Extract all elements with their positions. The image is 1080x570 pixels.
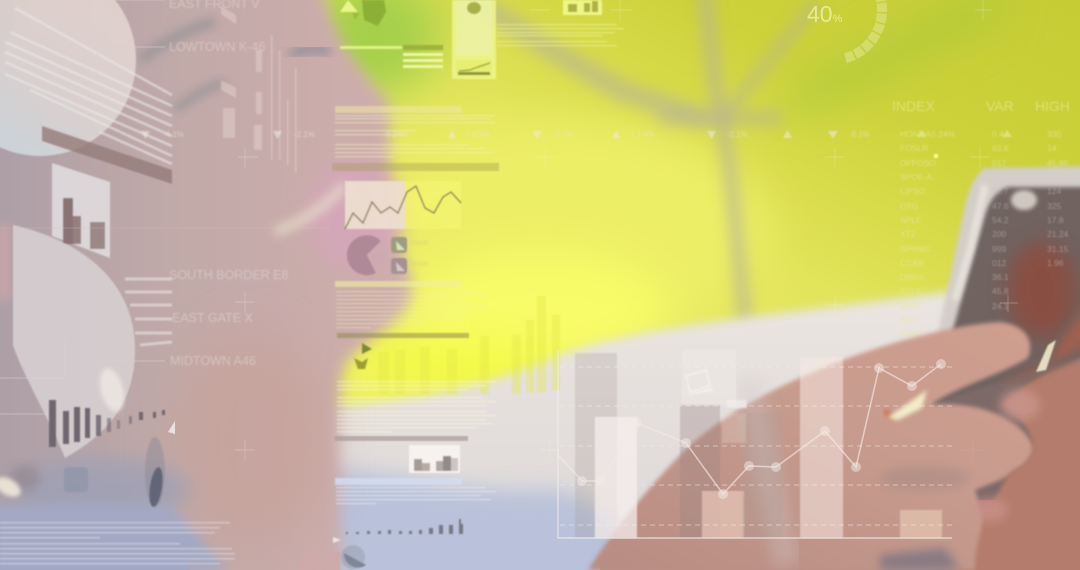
phone table values: 200	[992, 229, 1006, 239]
centre: bottom text block	[335, 478, 496, 504]
data table: 14	[1047, 143, 1057, 153]
data table: SPOE-A	[900, 172, 932, 182]
place labels: MIDTOWN A46	[170, 354, 256, 368]
ticker markers row: + 1.4%	[630, 130, 655, 139]
white card with bars	[52, 163, 110, 258]
pale stripe panel	[125, 279, 172, 345]
data table: LIPSO	[900, 186, 925, 196]
data table: DRGS	[900, 272, 925, 282]
data table: INDEX	[892, 98, 935, 114]
data table: SPRMS	[900, 244, 931, 254]
large pale shield shape	[13, 225, 135, 458]
centre: legend tiles: 00000	[410, 240, 428, 247]
face column graphics	[221, 6, 296, 173]
top centre: text block	[497, 24, 624, 46]
data table: SHT	[900, 315, 917, 325]
data table: FOSLR	[900, 143, 928, 153]
ticker markers row	[141, 130, 870, 139]
centre: legend tiles	[391, 237, 428, 274]
crosshair markers	[0, 0, 1018, 460]
leader lines	[0, 0, 165, 414]
phone table values: 24.1	[992, 301, 1009, 311]
ticker markers row: -8.1%	[849, 130, 870, 139]
data table: HONDA	[900, 129, 931, 139]
phone table values: 325	[1047, 201, 1061, 211]
centre: lower text block	[337, 381, 497, 432]
centre: bottom pie and arrow	[333, 537, 366, 569]
place labels: EAST GATE X	[172, 311, 253, 325]
centre: legend tiles: 00000	[410, 261, 428, 268]
phone table values: 17.8	[1047, 215, 1064, 225]
phone table values: 21.24	[1047, 229, 1069, 239]
phone table values: 1.96	[1047, 258, 1064, 268]
side dial	[145, 437, 165, 507]
data table: CCAN	[900, 258, 924, 268]
phone table values: 47.6	[992, 201, 1009, 211]
laptop icon	[686, 370, 747, 443]
data table: OTG	[900, 201, 918, 211]
background: green and grey blurred foliage	[310, 0, 1000, 389]
ticker markers row: -2.1%	[294, 130, 315, 139]
phone table values: 57.7	[992, 186, 1009, 196]
data table: 0.4	[992, 129, 1004, 139]
centre: faded area chart	[378, 296, 560, 394]
top centre: green pie icon	[340, 0, 386, 26]
left panel: data graphics	[0, 0, 175, 508]
diagonal stripe panel	[5, 8, 172, 164]
dashed grid lines	[560, 367, 952, 525]
place labels: SOUTH BORDER E8	[169, 268, 289, 282]
data table: VAR	[986, 98, 1014, 114]
background: leaf stem	[480, 0, 815, 380]
main combo chart	[558, 350, 952, 538]
person: facial features	[0, 22, 405, 550]
phone table values: 36.1	[992, 272, 1009, 282]
ticker markers row: + 0.5%	[465, 130, 490, 139]
centre: line chart card	[345, 181, 461, 229]
phone table values: 31.15	[1047, 244, 1069, 254]
phone	[920, 166, 1080, 420]
data table: XTZ	[900, 229, 916, 239]
data table: SPLF	[900, 215, 921, 225]
top centre: divider and small table	[340, 45, 443, 68]
top centre: tall card	[452, 0, 496, 79]
place labels	[169, 0, 289, 368]
ticker markers row: 0.24%	[386, 130, 409, 139]
data table: HIGH	[1035, 98, 1070, 114]
person: face silhouette	[0, 0, 412, 570]
centre: small rising column chart	[346, 519, 463, 534]
phone table values: 124	[1047, 186, 1061, 196]
phone table values: 54.2	[992, 215, 1009, 225]
chart axes	[558, 350, 952, 538]
centre: grey heading bar	[335, 436, 468, 441]
bottom left: paragraph text	[0, 522, 235, 564]
person: shirt bottom left	[0, 505, 228, 570]
data table: 0.24%	[931, 129, 956, 139]
centre: bar chart card	[409, 445, 460, 473]
trend line	[558, 364, 941, 494]
background: pale table and blue shirt	[300, 290, 1010, 570]
table bullet	[934, 154, 938, 158]
ticker markers row: -2.1%	[727, 130, 748, 139]
data table: 62.6	[992, 143, 1009, 153]
trend markers	[577, 359, 946, 499]
top centre: mini bar card	[563, 0, 602, 15]
data table: 017	[992, 158, 1006, 168]
data table: 45.60	[1047, 158, 1069, 168]
data table: 330	[1047, 129, 1061, 139]
phone table values: 012	[992, 258, 1006, 268]
data table	[892, 98, 1070, 339]
small pie tile	[64, 467, 88, 492]
chart bars	[575, 350, 942, 538]
phone table values: 45.8	[992, 286, 1009, 296]
centre: small arrow and leaf icons	[354, 343, 372, 369]
data table: OFFOSO	[900, 158, 936, 168]
ticker markers row: -2.1%	[553, 130, 574, 139]
dark heading bar	[42, 126, 172, 184]
data table: EOKT	[900, 329, 923, 339]
hand with fingers	[588, 290, 1080, 570]
data table: RTLV	[900, 286, 921, 296]
data table: IRRX	[900, 301, 921, 311]
gauge: 40 percent	[768, 0, 896, 74]
gauge: 40 percent: 40%	[807, 1, 843, 27]
centre: upper text block	[332, 106, 499, 171]
centre: pie chart	[347, 235, 387, 275]
phone table values: 999	[992, 244, 1006, 254]
centre: middle text block	[335, 281, 491, 338]
phone table values	[992, 186, 1069, 311]
ticker markers row: -4.1%	[163, 130, 184, 139]
mini column chart	[49, 400, 165, 447]
place labels: LOWTOWN K-46	[169, 40, 265, 54]
glare highlights	[96, 366, 128, 414]
